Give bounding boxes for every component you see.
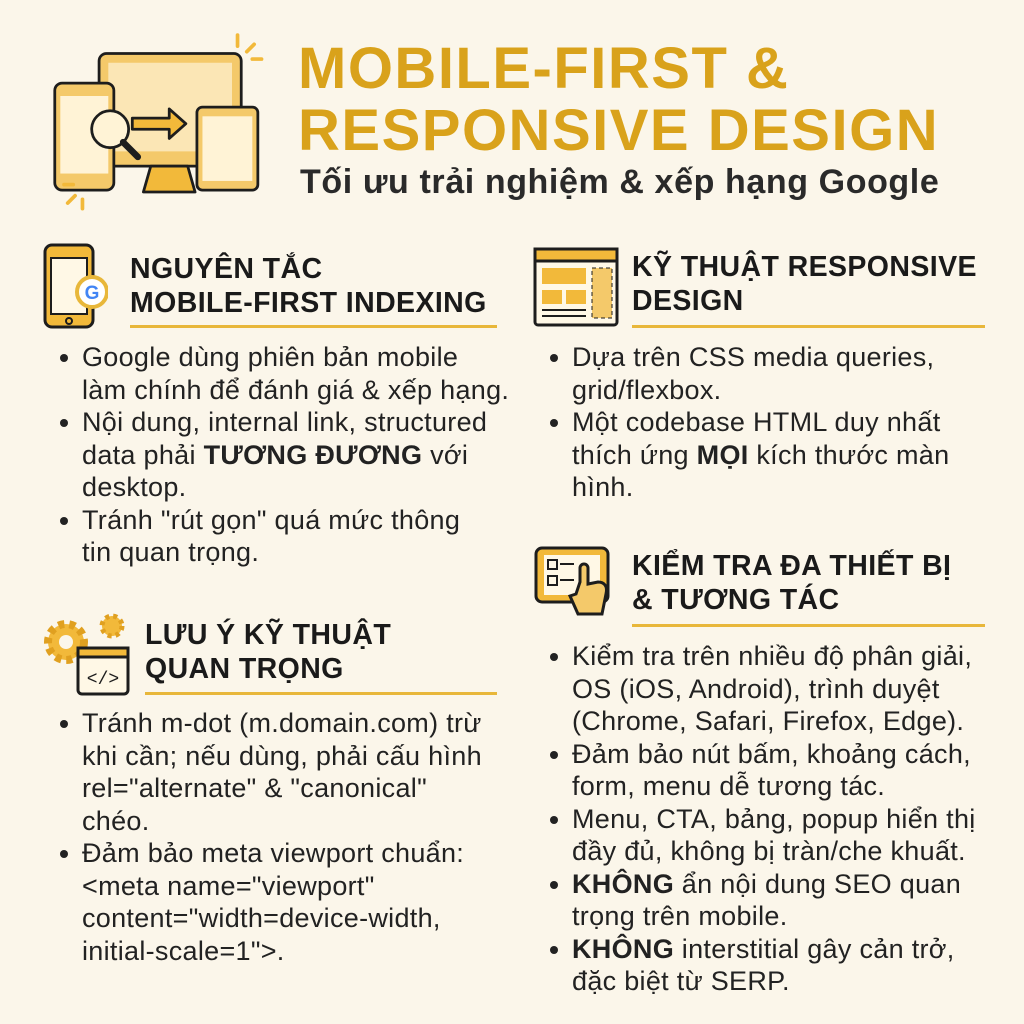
- icon: phone google: [44, 244, 108, 328]
- panel: mobile-first indexing: [44, 244, 509, 567]
- bullets: <meta name="viewport": [82, 870, 375, 900]
- heading: KIỂM TRA ĐA THIẾT BỊ: [632, 550, 951, 582]
- heading: KỸ THUẬT RESPONSIVE: [632, 251, 977, 283]
- bullets: initial-scale=1">.: [82, 936, 285, 966]
- panel: responsive techniques: [534, 248, 985, 502]
- heading: & TƯƠNG TÁC: [632, 584, 840, 616]
- bullets: đặc biệt từ SERP.: [572, 966, 790, 996]
- bullets: content="width=device-width,: [82, 903, 441, 933]
- title: [298, 36, 939, 163]
- icon: gears code: </>: [87, 670, 119, 690]
- bullets: [60, 708, 482, 966]
- subtitle: Tối ưu trải nghiệm & xếp hạng Google: [300, 163, 939, 201]
- bullets: grid/flexbox.: [572, 374, 721, 404]
- bullets: làm chính để đánh giá & xếp hạng.: [82, 374, 509, 404]
- heading: [145, 618, 391, 685]
- bullets: Kiểm tra trên nhiều độ phân giải,: [572, 641, 972, 671]
- heading: DESIGN: [632, 285, 744, 317]
- bullets: OS (iOS, Android), trình duyệt: [572, 674, 940, 704]
- bullets: Đảm bảo nút bấm, khoảng cách,: [572, 738, 971, 768]
- icon: tablet checklist hand: [534, 546, 610, 616]
- bullets: khi cần; nếu dùng, phải cấu hình: [82, 740, 482, 770]
- bullets: [550, 641, 976, 996]
- bullets: Một codebase HTML duy nhất: [572, 407, 940, 437]
- title: RESPONSIVE DESIGN: [298, 98, 939, 163]
- bullets: [60, 342, 509, 567]
- bullets: Google dùng phiên bản mobile: [82, 342, 458, 372]
- panel: multi-device testing: [534, 546, 985, 996]
- icon: devices header: [53, 33, 264, 210]
- icon: gears code: [44, 614, 130, 696]
- bullets: Tránh "rút gọn" quá mức thông: [82, 504, 460, 534]
- heading: NGUYÊN TẮC: [130, 253, 322, 285]
- title: MOBILE-FIRST &: [298, 36, 789, 101]
- bullets: Tránh m-dot (m.domain.com) trừ: [82, 708, 482, 738]
- bullets: tin quan trọng.: [82, 537, 259, 567]
- bullets: (Chrome, Safari, Firefox, Edge).: [572, 706, 964, 736]
- bullets: form, menu dễ tương tác.: [572, 771, 885, 801]
- bullets: Menu, CTA, bảng, popup hiển thị: [572, 804, 976, 834]
- panel: technical notes: [44, 614, 497, 966]
- bullets: hình.: [572, 472, 634, 502]
- heading: [632, 549, 951, 616]
- icon: phone google: G: [85, 283, 99, 304]
- bullets: data phải TƯƠNG ĐƯƠNG với: [82, 440, 468, 470]
- bullets: KHÔNG ẩn nội dung SEO quan: [572, 868, 961, 898]
- bullets: đầy đủ, không bị tràn/che khuất.: [572, 836, 966, 866]
- bullets: Nội dung, internal link, structured: [82, 407, 487, 437]
- heading: [130, 252, 487, 319]
- heading: MOBILE-FIRST INDEXING: [130, 287, 487, 319]
- heading: QUAN TRỌNG: [145, 653, 344, 685]
- bullets: rel="alternate" & "canonical": [82, 773, 427, 803]
- bullets: Đảm bảo meta viewport chuẩn:: [82, 838, 464, 868]
- heading: LƯU Ý KỸ THUẬT: [145, 619, 391, 651]
- icon: layout: [534, 248, 618, 326]
- bullets: chéo.: [82, 806, 150, 836]
- bullets: [550, 342, 949, 502]
- bullets: desktop.: [82, 472, 186, 502]
- heading: [632, 250, 977, 317]
- bullets: thích ứng MỌI kích thước màn: [572, 440, 949, 470]
- bullets: trọng trên mobile.: [572, 901, 788, 931]
- bullets: KHÔNG interstitial gây cản trở,: [572, 934, 955, 964]
- bullets: Dựa trên CSS media queries,: [572, 342, 934, 372]
